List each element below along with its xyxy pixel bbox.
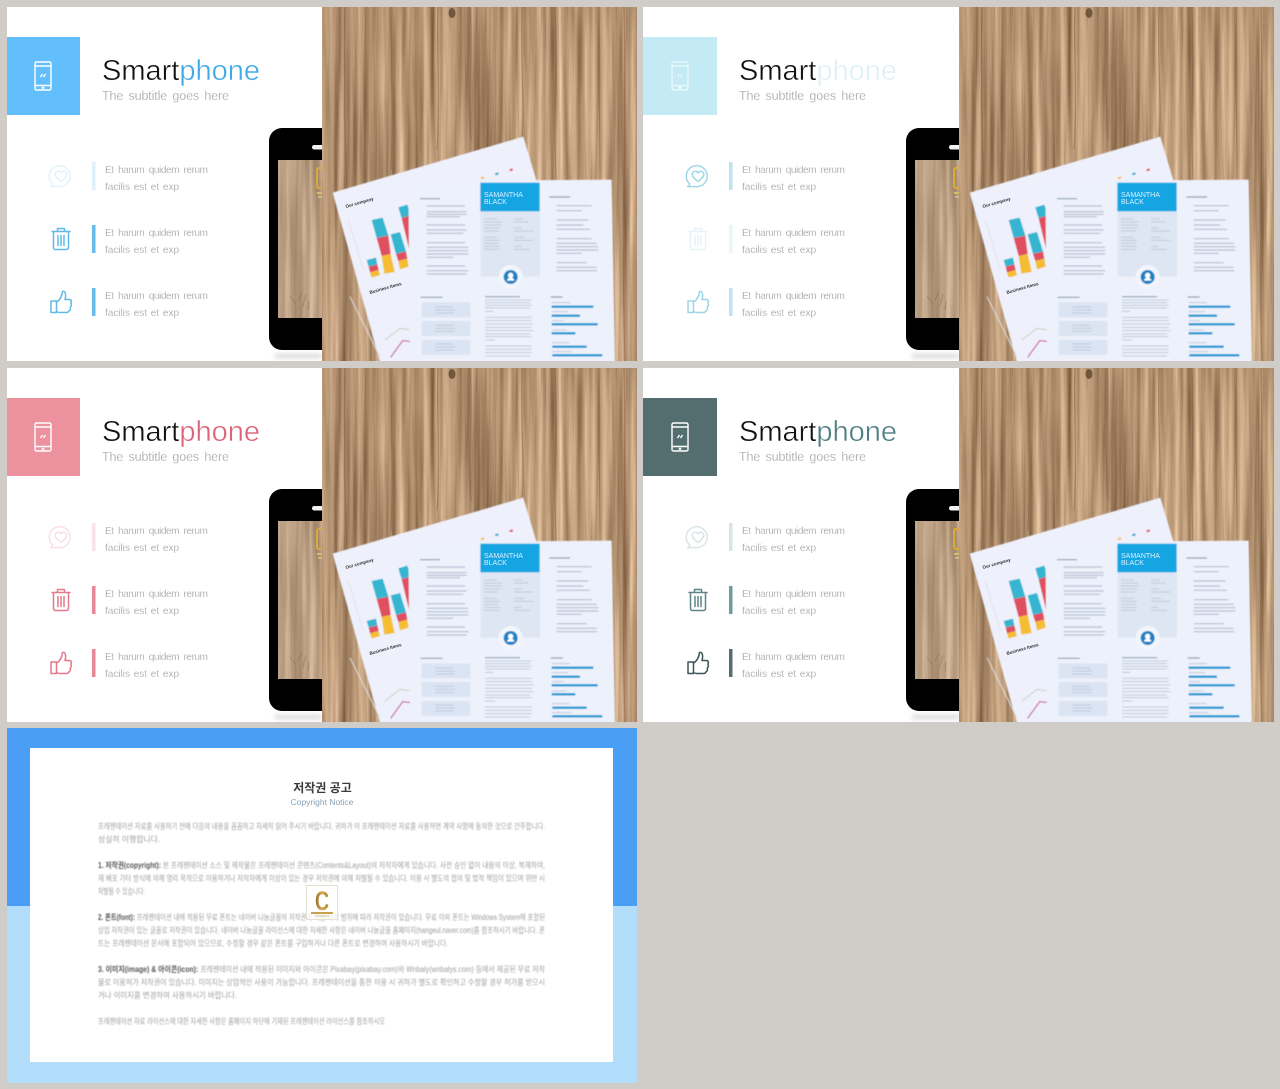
photo: wood desk with papers [322, 368, 637, 734]
item: trash: Et harum quidem rerum [742, 228, 845, 239]
notice body text: 처벌될 수 있습니다. [98, 886, 145, 896]
item: heart [686, 523, 845, 554]
notice body text: 1. 저작권(copyright): 본 프레젠테이션 소스 및 제작물은 프레젠테이션 콘텐츠(Contents&Layout)의 저작자에게 있습니다. 사전 승인 없이 내용의 이상, 복제하여, [98, 860, 545, 870]
item: thumbs up: Et harum quidem rerum [742, 291, 845, 302]
item: heart: Et harum quidem rerum [105, 526, 208, 537]
icon block: pink square with phone [7, 398, 80, 476]
paper labels [982, 553, 1160, 656]
item: thumbs up [51, 288, 208, 319]
subtitle: The subtitle goes here [739, 450, 866, 464]
panel: slide 1 blue [7, 7, 637, 373]
phone shadow [275, 715, 322, 719]
item: trash [52, 225, 208, 256]
item: thumbs up [688, 288, 845, 319]
notice body text: 프레젠테이션 자료를 사용하기 전에 다음의 내용을 꼼꼼하고 자세히 읽어 주시기 바랍니다. 귀하가 이 프레젠테이션 자료를 사용하면 계약 사항에 동의한 것으로 간주합니다. [98, 821, 545, 831]
watermark logo: C [315, 886, 329, 916]
item: trash: Et harum quidem rerum [105, 589, 208, 600]
item: heart [686, 162, 845, 193]
item: heart [49, 523, 208, 554]
paper labels: Our company [982, 557, 1012, 570]
panel: slide 2 pale cyan [643, 7, 1274, 373]
phone shadow [912, 715, 959, 719]
subtitle: The subtitle goes here [102, 450, 229, 464]
notice body text [98, 821, 545, 1026]
item: trash [52, 586, 208, 617]
phone shadow [912, 354, 959, 358]
paper labels: Our company [345, 557, 375, 570]
item: heart: Et harum quidem rerum [105, 165, 208, 176]
title: Smartphone [102, 55, 260, 87]
paper labels [345, 192, 523, 295]
notice body text: 트는 프레젠테이션 문서에 포함되어 있으므로, 수정할 경우 같은 폰트를 구입하거나 다른 폰트로 변경하여 사용하시기 바랍니다. [98, 938, 448, 948]
paper labels: BLACK [484, 560, 507, 567]
paper labels: SAMANTHA [1121, 192, 1160, 199]
paper labels [982, 192, 1160, 295]
paper labels: SAMANTHA [484, 553, 523, 560]
subtitle: The subtitle goes here [739, 89, 866, 103]
item: thumbs up: facilis est et exp [742, 669, 816, 680]
smartphone mockup [906, 128, 996, 350]
paper labels: Business Items [369, 642, 402, 656]
item: heart: Et harum quidem rerum [742, 526, 845, 537]
panel: copyright notice slide [7, 728, 637, 1083]
smartphone mockup [269, 489, 359, 711]
paper labels: Business Items [1006, 281, 1039, 295]
icon block: cyan square with phone [643, 37, 717, 115]
item: trash: Et harum quidem rerum [742, 589, 845, 600]
title: Smartphone [102, 416, 260, 448]
item: trash [689, 225, 845, 256]
item: trash: facilis est et exp [742, 245, 816, 256]
title: Smartphone [739, 416, 897, 448]
item: thumbs up: facilis est et exp [742, 308, 816, 319]
item: heart: facilis est et exp [742, 543, 816, 554]
item: thumbs up: Et harum quidem rerum [105, 652, 208, 663]
item: thumbs up: facilis est et exp [105, 308, 179, 319]
paper labels [345, 553, 523, 656]
item: trash: Et harum quidem rerum [105, 228, 208, 239]
item: trash: facilis est et exp [105, 245, 179, 256]
paper labels: SAMANTHA [484, 192, 523, 199]
smartphone mockup [906, 489, 996, 711]
item: heart [49, 162, 208, 193]
notice body text: 성실히 이행합니다. [98, 834, 160, 844]
panel: slide 3 pink [7, 368, 637, 734]
paper labels: BLACK [1121, 560, 1144, 567]
photo: wood desk with papers [959, 368, 1274, 734]
icon block: blue square with phone [7, 37, 80, 115]
item: thumbs up [51, 649, 208, 680]
notice body text: 물로 이용허가 저작권이 있습니다. 이미지는 상업적인 사용이 가능합니다. 프레젠테이션을 통한 이용 시 귀하가 별도로 확인하고 수정할 경우 허가를 받으시 [98, 977, 545, 987]
paper labels: Business Items [369, 281, 402, 295]
phone shadow [275, 354, 322, 358]
item: thumbs up: Et harum quidem rerum [105, 291, 208, 302]
item: thumbs up: Et harum quidem rerum [742, 652, 845, 663]
smartphone mockup [269, 128, 359, 350]
item: thumbs up [688, 649, 845, 680]
notice body text: 3. 이미지(image) & 아이콘(icon): 프레젠테이션 내에 적용된 이미지와 아이콘은 Pixabay(pixabay.com)와 Wnbaly(wnbalys.com) 등에서 제공된 무료 저작 [98, 964, 545, 974]
item: trash [689, 586, 845, 617]
notice body text: 상업 저작권이 있는 글꼴로 저작권이 있습니다. 네이버 나눔글꼴 라이선스에 대한 자세한 사항은 네이버 나눔글꼴 홈페이지(hangeul.naver.com)를 참조하시기 바랍니다. 폰 [98, 925, 545, 935]
icon block: slate square with phone [643, 398, 717, 476]
paper labels: BLACK [1121, 199, 1144, 206]
item: trash: facilis est et exp [105, 606, 179, 617]
item: trash: facilis est et exp [742, 606, 816, 617]
item: heart: Et harum quidem rerum [742, 165, 845, 176]
item: thumbs up: facilis est et exp [105, 669, 179, 680]
notice body text: 2. 폰트(font): 프레젠테이션 내에 적용된 무료 폰트는 네이버 나눔글꼴의 저작권과 이용 허락 범위에 따라 저작권이 있습니다. 무료 이외 폰트는 Windows System에 포함된 [98, 912, 545, 922]
panel: slide 4 slate teal [643, 368, 1274, 734]
title: Smartphone [739, 55, 897, 87]
watermark logo [306, 886, 338, 920]
item: heart: facilis est et exp [742, 182, 816, 193]
paper labels: BLACK [484, 199, 507, 206]
paper labels: Our company [982, 196, 1012, 209]
heading: copyright title: 저작권 공고 [293, 780, 352, 795]
item: heart: facilis est et exp [105, 543, 179, 554]
notice body text: 거나 이미지를 변경하여 사용하시기 바랍니다. [98, 990, 237, 1000]
notice body text: 재 배포 기타 방식에 의해 영리 목적으로 이용하거나 저작자에게 이상이 있는 경우 저작권에 의해 처벌될 수 있습니다. 이용 시 별도의 협의 및 법적 책임이 있으며 위반 시 [98, 873, 545, 883]
paper labels: Our company [345, 196, 375, 209]
paper labels: Business Items [1006, 642, 1039, 656]
photo: wood desk with papers [322, 7, 637, 373]
subheading: Copyright Notice [291, 797, 354, 807]
subtitle: The subtitle goes here [102, 89, 229, 103]
notice body text: 프레젠테이션 자료 라이선스에 대한 자세한 사항은 홈페이지 하단에 기재된 프레젠테이션 라이선스를 참조하시오 [98, 1016, 385, 1026]
photo: wood desk with papers [959, 7, 1274, 373]
item: heart: facilis est et exp [105, 182, 179, 193]
paper labels: SAMANTHA [1121, 553, 1160, 560]
